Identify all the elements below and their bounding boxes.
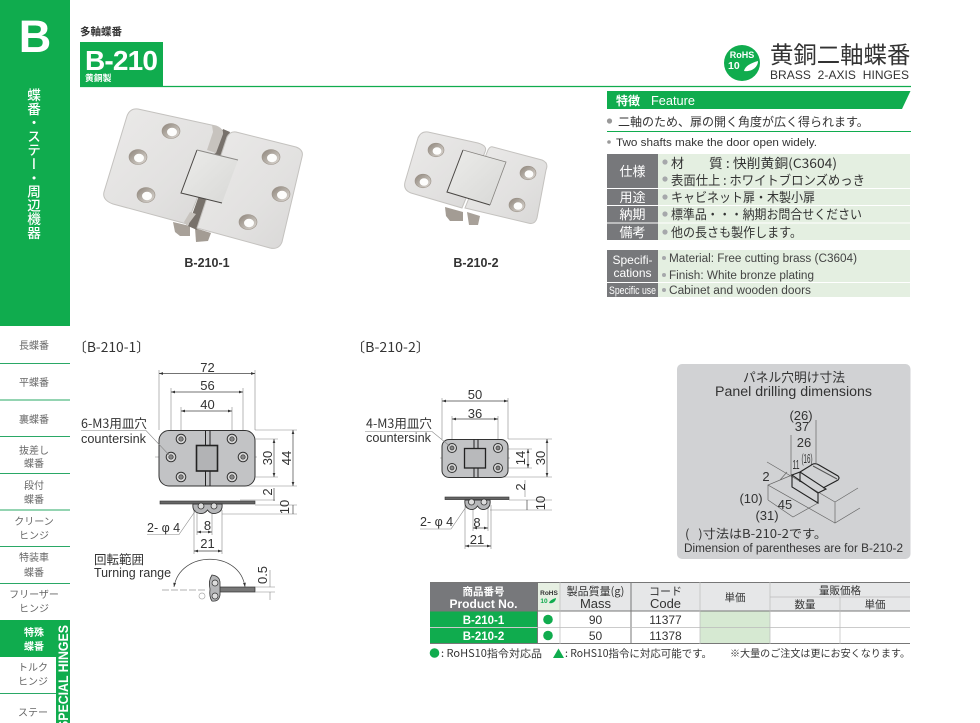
heading: model badge: B-210 — [85, 45, 158, 76]
drawing: turning range: 回転範囲 — [94, 549, 144, 568]
drawing: B-210-1 dimensions: 21 — [200, 536, 215, 551]
drawing: turning range — [94, 549, 275, 601]
countersink callout: 6-M3用皿穴 — [81, 413, 147, 432]
panel: specifications JP: 仕様 — [619, 161, 646, 180]
countersink callout: 4-M3用皿穴 — [366, 413, 432, 432]
hinge plate front view — [159, 430, 255, 486]
panel 3D diagram: (10) — [739, 491, 763, 506]
drawing heading: B-210-1: 〔B-210-1〕 — [73, 336, 150, 356]
drawing: B-210-2 dimensions: countersink — [366, 431, 432, 445]
table: product list: 製品質量(g) — [567, 583, 624, 599]
sidebar: category tab — [0, 0, 70, 326]
table: product list: Mass — [580, 596, 612, 611]
photo: B-210-1 hinge — [104, 109, 302, 248]
drawing: B-210-2 dimensions — [365, 387, 552, 549]
panel 3D diagram: (26) — [789, 408, 813, 423]
panel: specifications JP — [607, 153, 910, 241]
drawing: B-210-2 dimensions: 8 — [473, 515, 481, 530]
hinge plate front view — [442, 440, 508, 478]
shaft callout: 2- φ 4 — [420, 515, 453, 529]
table: product list: 50 — [589, 629, 602, 643]
drawing: B-210-2 dimensions: 30 — [533, 451, 548, 465]
table: product list: 11377 — [649, 613, 682, 627]
sidebar: navigation list: 蝶番 — [24, 564, 44, 579]
table footnote — [430, 645, 910, 661]
panel: panel drilling dimensions: Panel drilling dimensions — [715, 384, 872, 399]
sidebar: navigation list: 蝶番 — [24, 638, 44, 653]
table: product list: RoHS — [540, 590, 559, 597]
label: B-210-2: B-210-2 — [453, 256, 499, 270]
panel: specifications JP: 用途 — [619, 187, 646, 206]
panel: specifications EN: Specifi- — [612, 253, 653, 267]
panel: specifications JP: 標準品・・・納期お問合せください — [671, 204, 862, 223]
table: product list: 数量 — [794, 597, 816, 612]
panel: specifications EN: Cabinet and wooden doors — [669, 285, 811, 297]
table: product list: Product No. — [450, 597, 518, 611]
drawing: B-210-1 dimensions: 40 — [200, 397, 215, 412]
shaft callout: 2- φ 4 — [147, 521, 180, 535]
table footnote: : RoHS10指令に対応可能です。 — [565, 646, 712, 661]
panel 3D diagram: 26 — [797, 435, 811, 450]
panel 3D diagram — [739, 408, 860, 523]
sidebar: navigation list: 蝶番 — [24, 455, 44, 470]
table: product list: 単価 — [724, 590, 746, 605]
table footnote: ※大量のご注文は更にお安くなります。 — [730, 645, 910, 660]
table: product list: コード — [649, 583, 682, 599]
panel: feature: Feature — [651, 94, 695, 108]
sidebar: navigation list: 蝶番 — [24, 491, 44, 506]
panel: feature: Two shafts make the door open widely. — [616, 137, 817, 149]
sidebar: navigation list: ヒンジ — [19, 600, 49, 615]
table: product list: 単価 — [864, 597, 886, 612]
feature text JP — [607, 118, 612, 124]
sidebar: navigation list: 平蝶番 — [19, 374, 49, 389]
table header: 商品番号 — [462, 584, 504, 599]
icon: RoHS10 badge: 10 — [728, 60, 740, 72]
photo: B-210-2 hinge — [405, 132, 547, 225]
feature text EN — [607, 140, 611, 144]
icon: RoHS10 badge — [724, 45, 760, 81]
panel: panel drilling dimensions: Dimension of parentheses are for B-210-2 — [684, 543, 903, 555]
heading: product title: 黄銅二軸蝶番 — [770, 36, 910, 70]
dimension values: 50 — [468, 387, 482, 402]
drawing: B-210-2 dimensions: 36 — [468, 406, 482, 421]
heading: series label: 多軸蝶番 — [80, 24, 122, 39]
panel: specifications JP: キャビネット扉・木製小扉 — [671, 187, 815, 206]
sidebar: navigation list: ヒンジ — [18, 673, 48, 688]
sidebar: navigation list: 特殊 — [24, 624, 44, 639]
panel: specifications JP: 備考 — [619, 222, 646, 241]
panel: specifications EN — [607, 250, 910, 297]
table: product list: Code — [650, 596, 681, 611]
panel: specifications JP: 表面仕上 : ホワイトブロンズめっき — [671, 170, 865, 189]
panel: feature: 二軸のため、扉の開く角度が広く得られます。 — [618, 113, 869, 130]
panel 3D diagram: (16) — [802, 451, 812, 466]
table: product list: 10 — [540, 598, 548, 605]
drawing: B-210-1 dimensions — [81, 360, 297, 554]
sidebar: navigation list: フリーザー — [9, 586, 59, 601]
panel: specifications JP: 他の長さも製作します。 — [671, 222, 802, 241]
category name: 蝶番・ステー・周辺機器 — [24, 88, 44, 240]
panel: panel drilling dimensions — [677, 364, 910, 559]
sidebar: navigation list: 抜差し — [19, 442, 49, 457]
panel note: ( )寸法はB-210-2です。 — [685, 525, 827, 542]
drawing: B-210-1 dimensions: 2 — [260, 488, 275, 496]
sidebar: navigation list — [0, 337, 71, 723]
sidebar: navigation list: クリーン — [14, 513, 54, 528]
sidebar: navigation list: ヒンジ — [19, 527, 49, 542]
icon: RoHS10 badge: RoHS — [730, 50, 754, 60]
panel: specifications EN: cations — [613, 266, 652, 280]
table footnote: : RoHS10指令対応品 — [441, 646, 542, 661]
panel: specifications JP: 納期 — [619, 204, 646, 223]
panel: specifications JP: 材 — [671, 153, 684, 172]
drawing: B-210-2 dimensions: 10 — [533, 496, 548, 510]
drawing: turning range: 0.5 — [255, 566, 270, 584]
sidebar: navigation list: 長蝶番 — [19, 337, 49, 352]
panel: specifications JP: 質 : 快削黄銅(C3604) — [709, 153, 837, 172]
heading: model badge — [80, 42, 163, 86]
drawing: B-210-1 dimensions: 30 — [260, 451, 275, 465]
drawing: B-210-1 dimensions: 44 — [279, 451, 294, 465]
table: product list: 量販価格 — [819, 583, 861, 598]
table: product list: B-210-2 — [463, 631, 504, 643]
dimension values: 72 — [200, 360, 215, 375]
category letter: B — [19, 11, 51, 62]
panel 3D diagram: 2 — [762, 469, 770, 484]
table rows: B-210-1 — [463, 615, 505, 627]
drawing: B-210-2 dimensions: 21 — [470, 532, 484, 547]
panel 3D diagram: 37 — [795, 419, 809, 434]
drawing: B-210-1 dimensions: 8 — [204, 518, 211, 533]
panel: feature: 特徴 — [616, 92, 640, 109]
sidebar: navigation list: 段付 — [24, 477, 44, 492]
drawing: turning range: Turning range — [94, 565, 171, 580]
drawing: B-210-1 dimensions: 10 — [277, 500, 292, 514]
panel 3D diagram: (31) — [755, 508, 779, 523]
heading: product title: BRASS 2-AXIS HINGES — [770, 68, 909, 82]
panel 3D diagram: 11 — [792, 457, 800, 472]
hinge side view — [160, 501, 255, 504]
drawing heading: B-210-2: 〔B-210-2〕 — [351, 336, 430, 356]
table: product list: 11378 — [649, 629, 682, 643]
drawing: B-210-1 dimensions: countersink — [81, 432, 147, 446]
hinge side view — [445, 497, 509, 500]
panel: specifications EN: Material: Free cutting brass (C3604) — [669, 253, 857, 265]
table: product list — [430, 582, 910, 644]
panel title: パネル穴明け寸法 — [743, 367, 845, 386]
panel 3D diagram: 45 — [778, 497, 792, 512]
drawing: B-210-2 dimensions: 14 — [513, 451, 528, 465]
panel: specifications EN: Specific use — [609, 285, 656, 297]
label: B-210-1: B-210-1 — [184, 256, 230, 270]
drawing: B-210-1 dimensions: 56 — [200, 378, 215, 393]
drawing: B-210-2 dimensions: 2 — [513, 483, 528, 491]
sidebar: navigation list: ステー — [18, 704, 48, 719]
feature banner — [607, 91, 910, 109]
sidebar: navigation list: 裏蝶番 — [19, 411, 49, 426]
table: product list: 90 — [589, 613, 602, 627]
sidebar: navigation list: 特装車 — [19, 549, 49, 564]
panel: specifications EN: Finish: White bronze plating — [669, 270, 814, 282]
panel: feature — [607, 91, 911, 149]
heading: model badge: 黄銅製 — [85, 71, 112, 84]
sidebar: navigation list: トルク — [18, 659, 48, 674]
